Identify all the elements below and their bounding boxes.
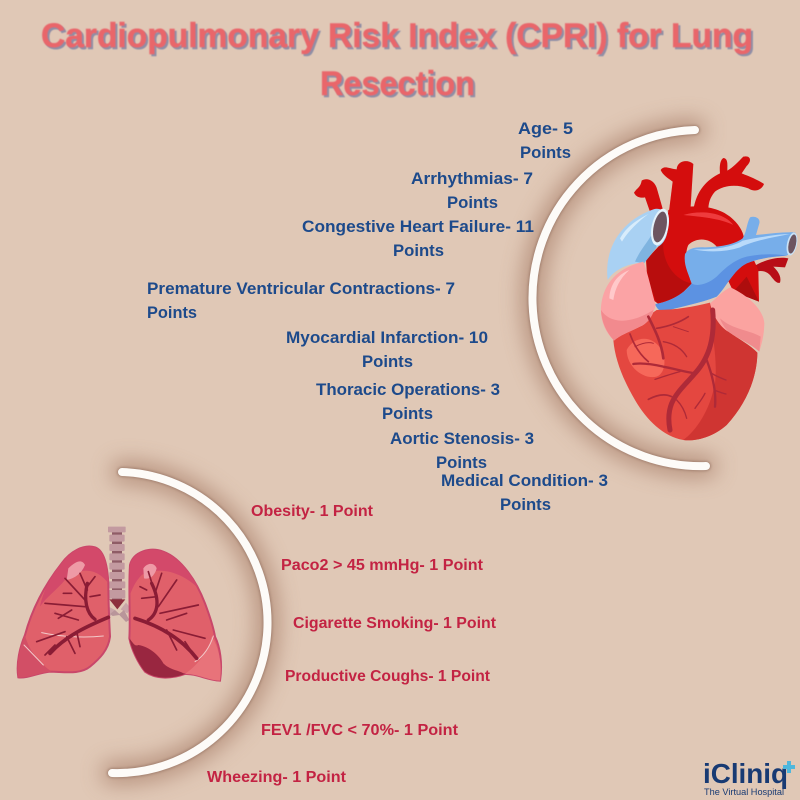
title: Cardiopulmonary Risk Index (CPRI) for Lung [43,19,755,57]
right side vessel [753,258,788,283]
Paco2 item: Paco2 > 45 mmHg- 1 Point [281,557,483,574]
Medical Condition item [441,472,608,514]
Obesity item: Obesity- 1 Point [251,503,373,520]
right artery branch [693,156,764,210]
ventricles [613,303,757,440]
trachea [108,527,131,622]
aortic arch [646,206,759,310]
Medical Condition item: Points [500,496,551,514]
vena cava [607,209,668,280]
left lung [18,547,110,677]
Thoracic Operations item [316,381,500,423]
Cigarette Smoking item: Cigarette Smoking- 1 Point [293,615,496,632]
Myocardial Infarction item: Points [362,353,413,371]
Aortic Stenosis item: Points [436,454,487,472]
right lung [129,550,221,681]
Congestive Heart Failure item [302,218,534,260]
right atrium [710,287,764,352]
shaded aorta [647,242,692,303]
title: Cardiopulmonary Risk Index (CPRI) for Lung [41,17,753,55]
bronchial trees [37,572,205,658]
Arrhythmias item: Arrhythmias- 7 [411,170,533,188]
Thoracic Operations item: Thoracic Operations- 3 [316,381,500,399]
title: Resection [322,67,477,105]
Age item [518,120,573,162]
Premature Ventricular Contractions item [147,280,455,322]
FEV1/FVC item: FEV1 /FVC < 70%- 1 Point [261,722,458,739]
title: Resection [320,65,475,103]
logo: iCliniq: iCliniq [703,758,788,789]
Thoracic Operations item: Points [382,405,433,423]
Arrhythmias item [411,170,533,212]
left atrium [601,262,656,341]
middle artery branch [661,161,693,217]
Aortic Stenosis item: Aortic Stenosis- 3 [390,430,534,448]
coronary vessels [630,310,726,430]
Productive Coughs item: Productive Coughs- 1 Point [285,668,490,685]
Age item: Age- 5 [518,120,573,138]
logo: iCliniq: The Virtual Hospital [704,787,784,798]
cardiac risk list [147,120,608,514]
Age item: Points [520,144,571,162]
pulmonary risk list [207,503,496,786]
Congestive Heart Failure item: Congestive Heart Failure- 11 [302,218,534,236]
icon: lungs [18,527,221,681]
left artery branch [634,179,664,217]
Myocardial Infarction item [286,329,488,371]
heart arc [532,130,706,466]
Aortic Stenosis item [390,430,534,472]
Congestive Heart Failure item: Points [393,242,444,260]
lung fissures [24,633,213,665]
icon: heart [601,156,799,440]
title [41,17,755,105]
pulmonary artery [655,217,797,312]
Premature Ventricular Contractions item: Points [147,304,197,322]
Premature Ventricular Contractions item: Premature Ventricular Contractions- 7 [147,280,455,298]
Myocardial Infarction item: Myocardial Infarction- 10 [286,329,488,347]
Medical Condition item: Medical Condition- 3 [441,472,608,490]
lungs arc [112,472,268,773]
Arrhythmias item: Points [447,194,498,212]
Wheezing item: Wheezing- 1 Point [207,769,346,786]
